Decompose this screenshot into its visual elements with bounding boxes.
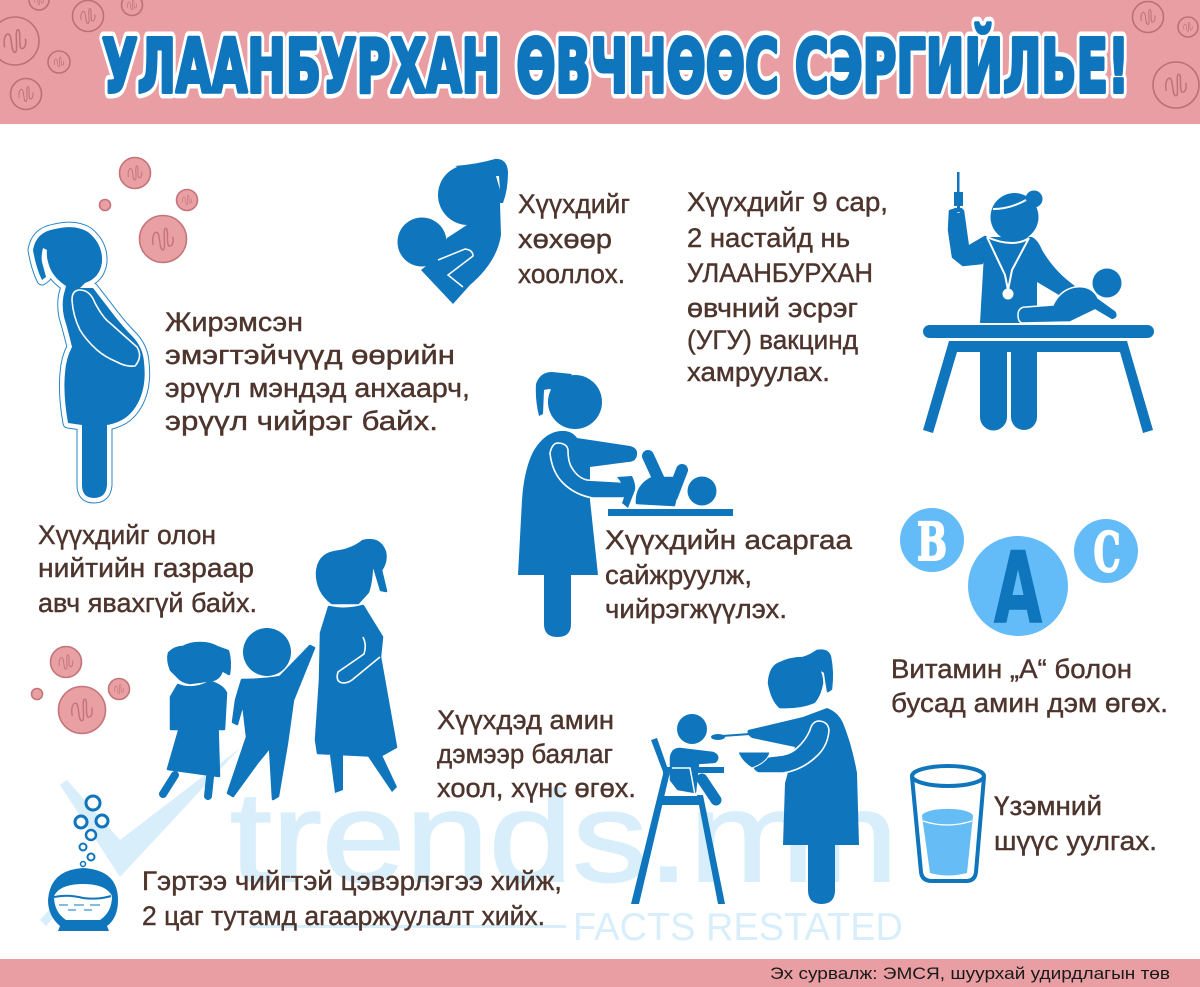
icon: vitamins B A C: B [917,512,947,573]
text: avoid public places: авч явахгүй байх. [38,588,257,618]
text: raisin juice: Үзэмний [994,791,1102,821]
text: nutritious food: дэмээр баялаг [437,739,613,769]
watermark: trends.mn [40,748,903,949]
icon: mother changing baby [518,372,733,637]
mother figure [316,540,397,793]
icon: vitamins B A C: A [994,532,1042,646]
vapour bubbles [75,796,108,866]
icon: vitamins B A C [900,508,1138,646]
text: vaccination: УЛААНБУРХАН [687,258,873,288]
syringe [954,172,963,218]
text: vitamin A: Витамин „А“ болон [891,654,1132,684]
icon: pregnant woman [33,227,145,498]
text: vitamin A [891,654,1168,718]
icon: mother feeding baby in high chair [631,651,859,904]
header virus decorations [0,0,1199,110]
virus cluster: upper left [100,158,198,262]
text: raisin juice: шүүс уулгах. [994,826,1157,856]
baby [671,714,717,800]
text: breastfeed: хооллох. [518,259,625,289]
text: avoid public places: нийтийн газраар [38,553,254,583]
virus cluster: lower left [32,646,130,734]
text: humid cleaning and ventilation: Гэртээ чийгтэй цэвэрлэгээ хийж, [142,866,562,896]
text: vaccination: (УГУ) вакцинд [687,325,859,355]
text: avoid public places: Хүүхдийг олон [38,520,216,550]
text: child care: сайжруулж, [605,560,752,590]
text: humid cleaning and ventilation: 2 цаг тутамд агааржуулалт хийх. [142,901,545,931]
examination table [923,325,1154,433]
text: vitamin A: бусад амин дэм өгөх. [891,688,1168,718]
text: nutritious food: Хүүхдэд амин [437,705,614,735]
text: pregnant women advice: эрүүл чийрэг байх. [165,406,438,436]
text: raisin juice [994,791,1157,856]
text: pregnant women advice: Жирэмсэн [165,307,303,337]
high chair [631,738,725,904]
text: vaccination: өвчний эсрэг [687,293,858,323]
text: vaccination: хамруулах. [687,357,830,387]
baby on changing table [608,456,733,516]
text: breastfeed: Хүүхдийг [518,189,630,219]
source line: Эх сурвалж: ЭМСЯ, шуурхай удирдлагын төв [770,964,1170,983]
text: breastfeed [518,189,630,289]
icon: vitamins B A C: C [1094,520,1120,584]
icon: doctor vaccinating baby [923,172,1154,433]
watermark: trends.mn: trends.mn [230,766,898,909]
icon: breastfeeding mother [398,159,508,304]
text: breastfeed: хөхөөр [518,224,612,254]
icon: humidifier [48,796,118,931]
header band [0,0,1200,124]
footer band [0,959,1200,987]
text: humid cleaning and ventilation [142,866,562,931]
text: child care: чийрэгжүүлэх. [605,594,787,624]
girl figure [163,643,230,796]
text: vaccination: Хүүхдийг 9 сар, [687,187,888,217]
bowl [738,752,770,768]
feeding mother [748,651,859,904]
text: vaccination: 2 настайд нь [687,223,850,253]
text: nutritious food [437,705,636,803]
icon: mother with two children [163,540,397,799]
text: child care: Хүүхдийн асаргаа [605,525,852,555]
watermark: trends.mn: FACTS RESTATED [573,906,903,949]
text: pregnant women advice: эрүүл мэндэд анхаарч, [165,373,470,403]
text: vaccination [687,187,888,387]
text: pregnant women advice: эмэгтэйчүүд өөрийн [165,340,455,370]
boy figure [228,628,314,799]
icon: glass of juice [912,766,984,881]
baby on table [1018,268,1122,323]
text: avoid public places [38,520,257,618]
text: nutritious food: хоол, хүнс өгөх. [437,773,636,803]
text: pregnant women advice [165,307,470,436]
text: child care [605,525,852,624]
spoon [711,734,750,740]
